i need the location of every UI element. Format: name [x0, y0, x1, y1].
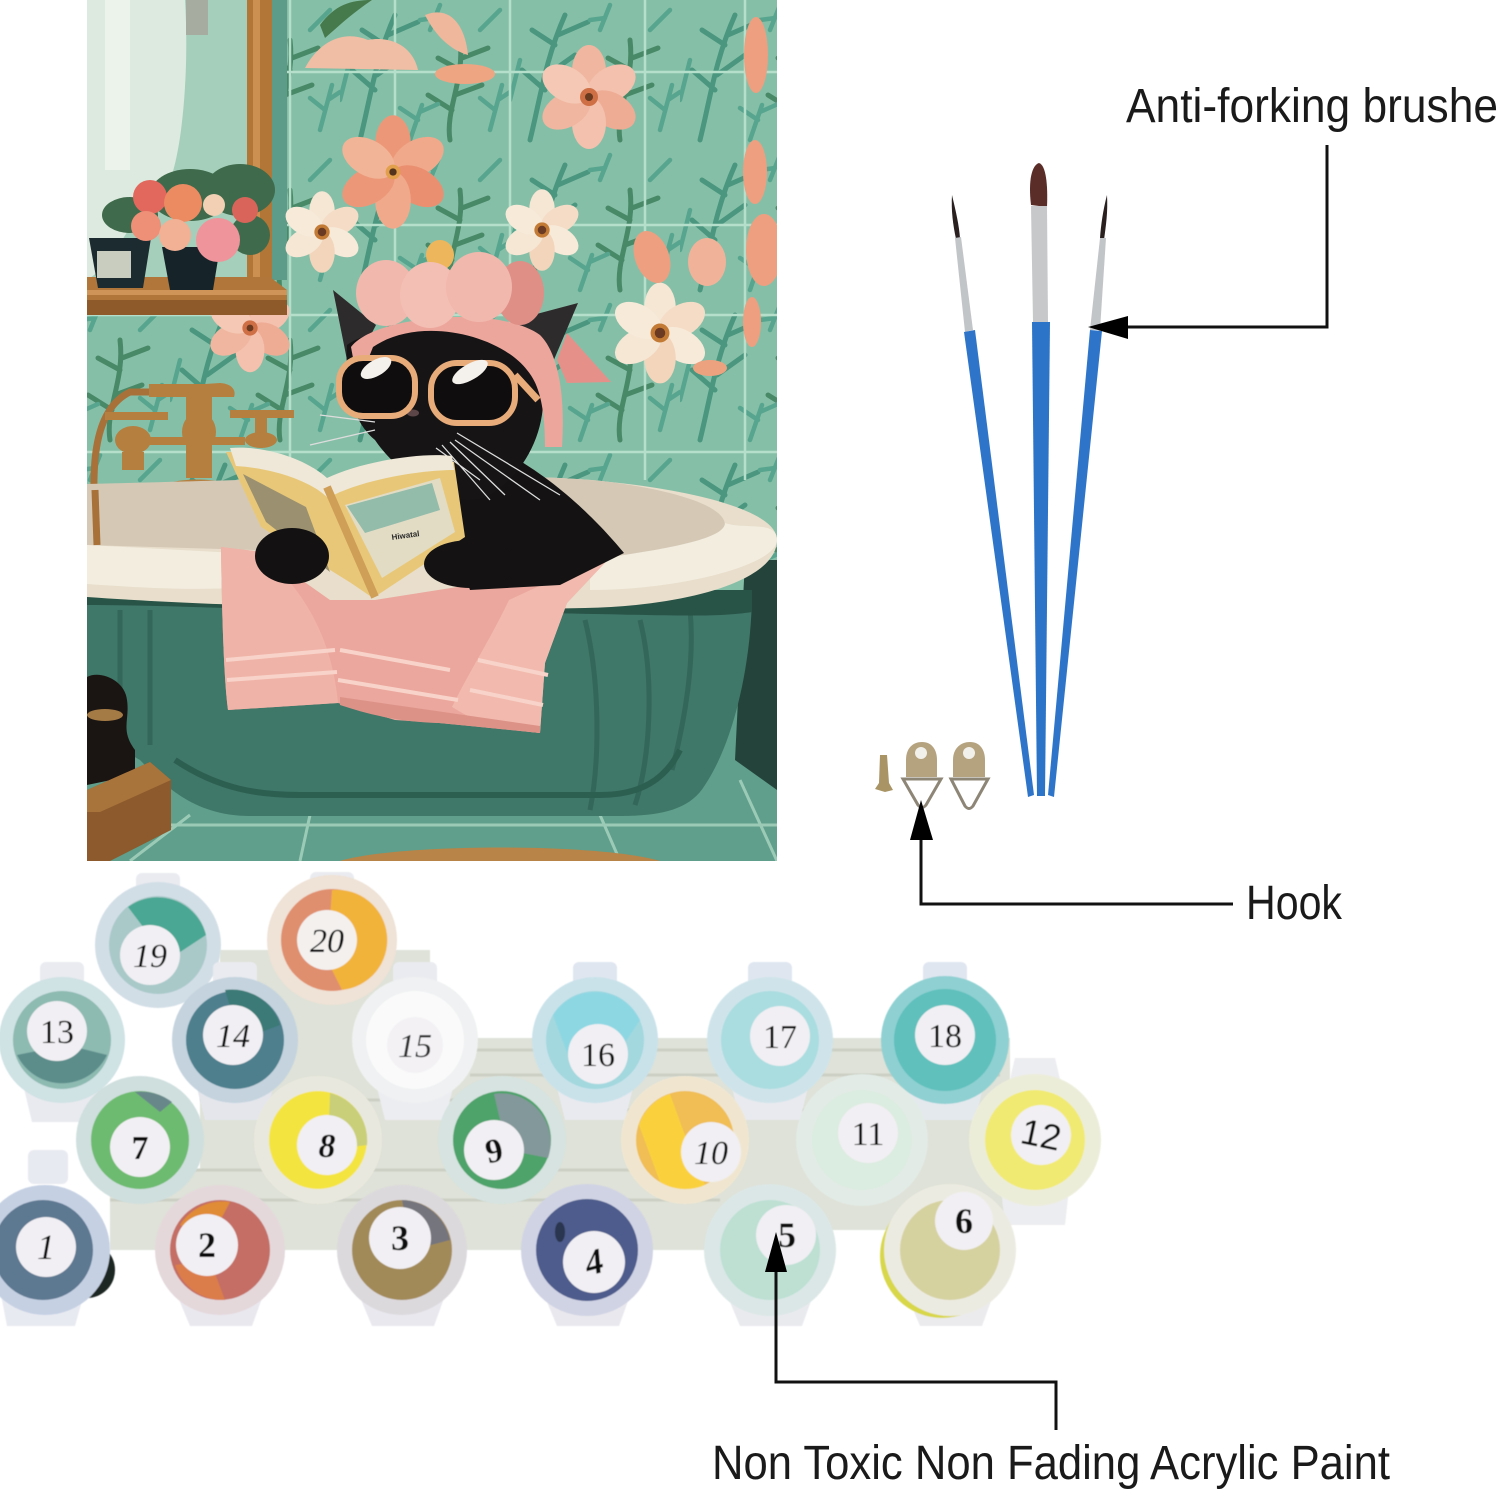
- faucet: [90, 383, 294, 484]
- pot 7: 7: [132, 1130, 148, 1167]
- brush: left: [952, 195, 1034, 797]
- pot 3: 3: [391, 1218, 409, 1258]
- pot 10: [621, 1076, 749, 1204]
- right wall shadow: [735, 560, 777, 790]
- cat paws: [255, 528, 470, 588]
- pot 6: [880, 1184, 1016, 1326]
- pot 14: [172, 962, 298, 1120]
- pot 1: [0, 1150, 115, 1326]
- towel: [221, 547, 617, 733]
- brush: center: [1030, 163, 1050, 796]
- pot 11: [796, 1074, 928, 1206]
- brush: right: [1048, 195, 1107, 797]
- hooks and screw: [875, 742, 988, 808]
- arrow: hook callout: [910, 800, 1233, 904]
- pot 8: 8: [318, 1128, 336, 1165]
- pot 19: [95, 873, 221, 1008]
- pot 12: 12: [1017, 1110, 1065, 1159]
- pot 9: 9: [482, 1132, 506, 1171]
- panel: painting of black cat in bathtub: [87, 0, 782, 861]
- pot 5: 5: [778, 1215, 796, 1255]
- pot 20: 20: [310, 923, 344, 960]
- pot 5: [704, 1184, 836, 1326]
- shelf with potted flowers: [87, 164, 287, 315]
- arrow: brushes callout: [1088, 145, 1327, 339]
- pot 12: [969, 1058, 1101, 1225]
- pot 2: 2: [198, 1225, 216, 1265]
- pot 3: [337, 1185, 467, 1326]
- tub rim and basin: [87, 476, 777, 609]
- pot 20: [267, 872, 397, 1005]
- box and black items on floor: [87, 675, 171, 861]
- pot 6: 6: [955, 1201, 973, 1241]
- cat: [310, 290, 624, 590]
- pot 13: 13: [40, 1014, 74, 1051]
- pot 7: [76, 1076, 204, 1204]
- book: [226, 448, 465, 598]
- sunglasses: [339, 353, 538, 423]
- paint pot tray: [110, 950, 1010, 1250]
- pot 15: 15: [398, 1028, 432, 1065]
- pot 11: 11: [852, 1116, 884, 1153]
- wall flowers: [204, 0, 782, 383]
- pot 18: [881, 962, 1009, 1120]
- pot 14: 14: [216, 1018, 250, 1055]
- pot 4: 4: [579, 1240, 608, 1284]
- pot 16: [532, 962, 658, 1120]
- pot 8: [254, 1076, 382, 1204]
- pot 15: [352, 962, 478, 1120]
- pink bath cap: [351, 252, 611, 447]
- pot 17: [707, 962, 833, 1120]
- arrow: paint callout: [765, 1232, 1056, 1430]
- pot 4: [521, 1184, 653, 1326]
- pot 18: 18: [928, 1018, 962, 1055]
- label: hook: Hook: [1246, 877, 1343, 930]
- pot 13: [0, 962, 125, 1122]
- pot 17: 17: [763, 1019, 797, 1056]
- pot 2: [155, 1185, 285, 1326]
- floor: [87, 704, 777, 861]
- pot 1: 1: [37, 1227, 55, 1267]
- shower curtain and mirror: [87, 0, 287, 290]
- pot 16: 16: [581, 1037, 615, 1074]
- pot 10: 10: [694, 1135, 728, 1172]
- label: paint: Non Toxic Non Fading Acrylic Paint: [712, 1437, 1390, 1490]
- pot 19: 19: [133, 938, 167, 975]
- pot 9: [438, 1076, 566, 1204]
- wall with tiles: [87, 0, 777, 620]
- brushes: [952, 163, 1107, 797]
- tub body: [87, 590, 752, 816]
- book title: Hiwatal: [391, 529, 420, 542]
- paint pots: [0, 872, 1101, 1326]
